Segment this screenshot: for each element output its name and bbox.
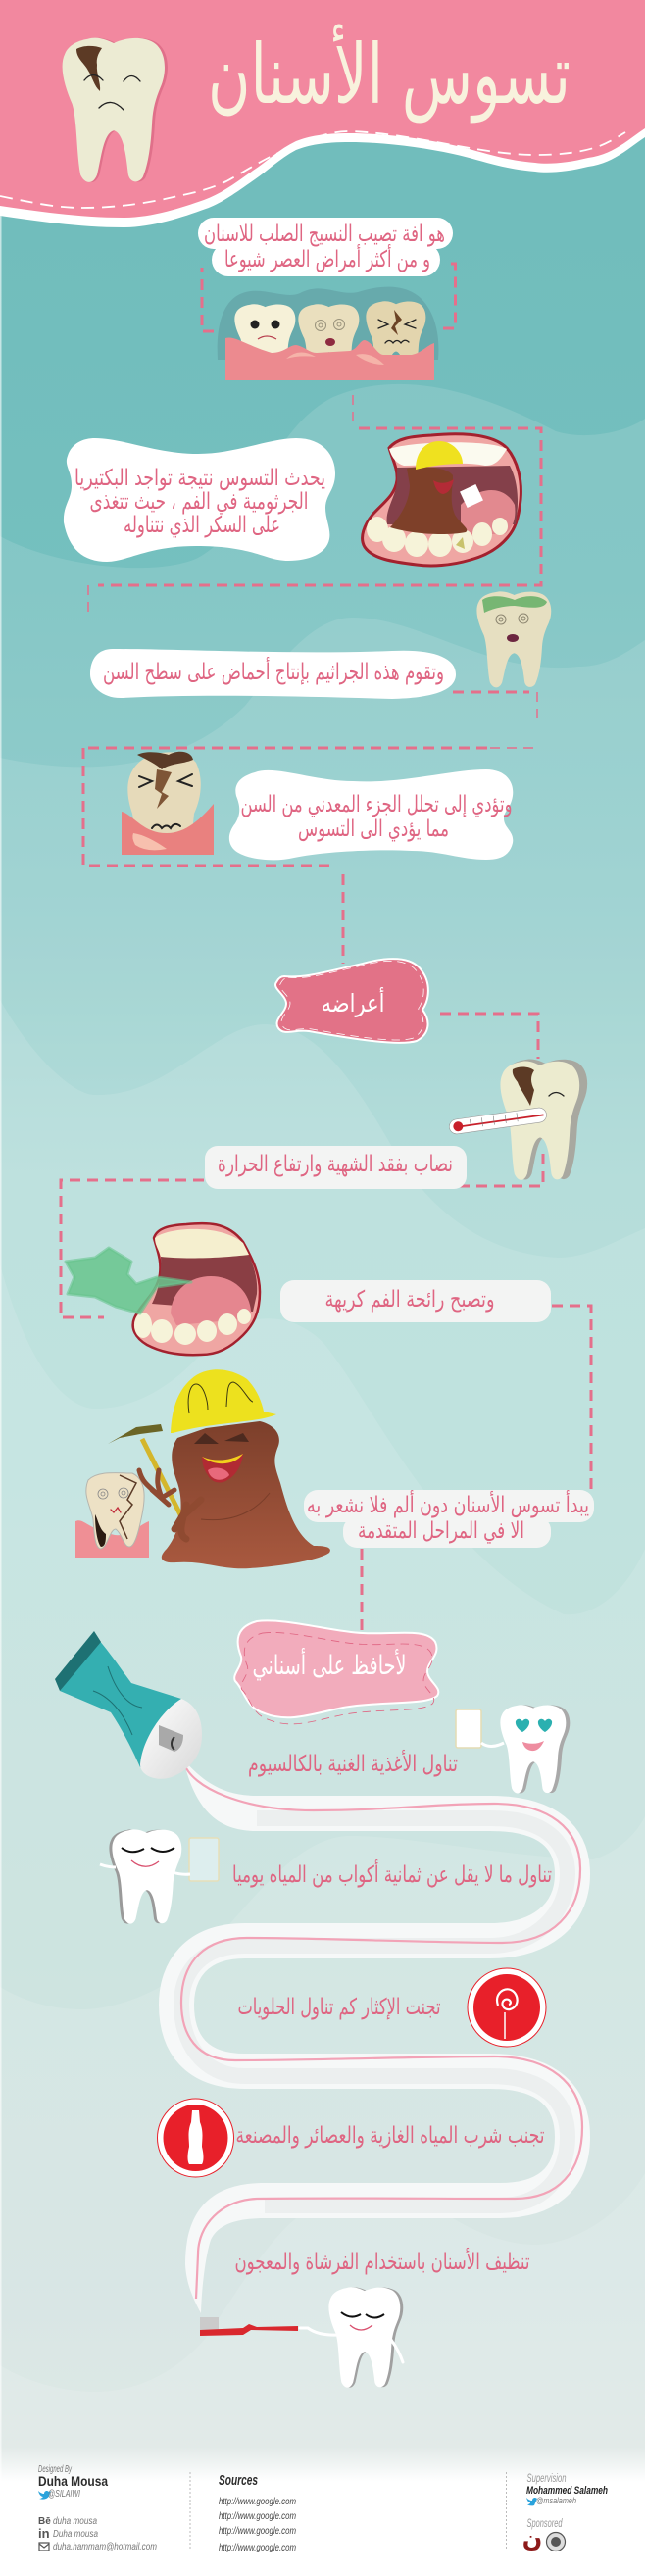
icon: lollipop — [468, 1968, 546, 2047]
footer: supervision and sponsors: @msalameh — [536, 2496, 576, 2505]
bubble: definition — [198, 218, 453, 276]
label: appetite and fever — [205, 1146, 467, 1189]
connector dashes — [61, 1149, 543, 1317]
icon: toothpaste tube — [55, 1631, 202, 1779]
bubble: acids: وتقوم هذه الجراثيم بإنتاج أحماض على سطح السن — [103, 657, 444, 685]
icon: happy tooth with milk — [456, 1705, 570, 1793]
icon: happy tooth with water — [100, 1829, 219, 1924]
bubble: painless onset: الا في المراحل المتقدمة — [358, 1518, 524, 1544]
connector dashes — [88, 395, 541, 618]
footer: designer credits: Bē — [38, 2516, 51, 2527]
connector dashes — [83, 692, 537, 964]
bubble: mineral dissolution: وتؤدي إلى تحلل الجزء المعدني من السن — [241, 792, 512, 817]
bubble: bacteria cause: على السكر الذي نتناوله — [124, 513, 280, 538]
footer: designer credits — [38, 2464, 157, 2552]
illustration: bad breath mouth — [66, 1223, 260, 1355]
text: calcium foods: تناول الأغذية الغنية بالكالسيوم — [248, 1750, 458, 1777]
text: brushing: تنظيف الأسنان باستخدام الفرشاة والمعجون — [235, 2248, 529, 2275]
footer: supervision and sponsors: Sponsored — [527, 2516, 563, 2530]
illustration: three teeth in gum — [218, 287, 438, 380]
text: avoid soft drinks: تجنب شرب المياه الغازية والعصائر والمصنعة — [235, 2123, 545, 2149]
bubble: painless onset — [304, 1490, 594, 1548]
bubble: bacteria cause: الجرثومية في الفم ، حيث تتغذى — [90, 489, 308, 515]
footer: designer credits: Designed By — [38, 2464, 73, 2475]
footer: designer credits: @SILAIWI — [48, 2489, 80, 2500]
icon: decayed tooth header — [63, 38, 168, 182]
footer: sources: http://www.google.com — [219, 2497, 296, 2507]
icon: tooth holding toothbrush — [200, 2287, 403, 2388]
connector dashes — [361, 1549, 363, 1630]
bubble: bacteria cause — [64, 438, 335, 562]
footer: supervision and sponsors: ن — [522, 2525, 542, 2552]
footer: designer credits: duha.hammam@hotmail.com — [53, 2542, 157, 2552]
footer: sources — [219, 2472, 296, 2553]
illustration: broken tooth in gum — [122, 752, 214, 855]
header banner — [0, 0, 645, 227]
bubble: definition: هو افة تصيب النسيج الصلب للاسنان — [204, 222, 445, 247]
icon: soda bottle — [157, 2099, 233, 2177]
icon: tooth with thermometer — [448, 1059, 587, 1180]
icon: tooth with green plaque — [476, 591, 551, 687]
arrow: definition bracket — [202, 264, 455, 331]
connector dashes — [440, 1014, 538, 1059]
toothpaste ribbon — [176, 1759, 582, 2313]
bubble: definition: و من أكثر أمراض العصر شيوعا — [224, 244, 430, 272]
connector dashes — [552, 1306, 591, 1490]
illustration: bacteria with pickaxe attacking tooth — [75, 1369, 330, 1568]
bubble: acids — [90, 649, 456, 699]
footer: sources: http://www.google.com — [219, 2526, 296, 2537]
footer: supervision and sponsors: Mohammed Salameh — [526, 2485, 608, 2497]
heading: symptoms: أعراضه — [322, 986, 384, 1017]
footer: designer credits: Duha mousa — [53, 2529, 98, 2540]
illustration: mouth with bacteria — [363, 434, 521, 566]
bubble: bacteria cause: يحدث التسوس نتيجة تواجد البكتيريا — [74, 466, 325, 491]
text: avoid sweets: تجنت الإكثار كم تناول الحلويات — [237, 1995, 441, 2020]
footer: designer credits: duha mousa — [53, 2516, 97, 2527]
footer: sources: http://www.google.com — [219, 2511, 296, 2522]
footer: supervision and sponsors: Supervision — [527, 2471, 567, 2485]
footer: sources: http://www.google.com — [219, 2543, 296, 2553]
bubble: mineral dissolution: مما يؤدي الى التسوس — [298, 817, 449, 842]
footer: sources: Sources — [219, 2472, 258, 2489]
label: bad breath — [280, 1280, 551, 1322]
footer: supervision and sponsors — [522, 2471, 608, 2552]
heading: symptoms — [275, 959, 428, 1043]
label: bad breath: وتصبح رائحة الفم كريهة — [325, 1287, 494, 1313]
heading: protecting my teeth: لأحافظ على أسناني — [253, 1647, 406, 1681]
label: appetite and fever: نصاب بفقد الشهية وارتفاع الحرارة — [218, 1152, 453, 1177]
footer: designer credits: Duha Mousa — [38, 2473, 108, 2489]
heading: protecting my teeth — [234, 1620, 438, 1724]
bubble: mineral dissolution — [229, 769, 513, 860]
footer: designer credits: in — [38, 2526, 50, 2541]
